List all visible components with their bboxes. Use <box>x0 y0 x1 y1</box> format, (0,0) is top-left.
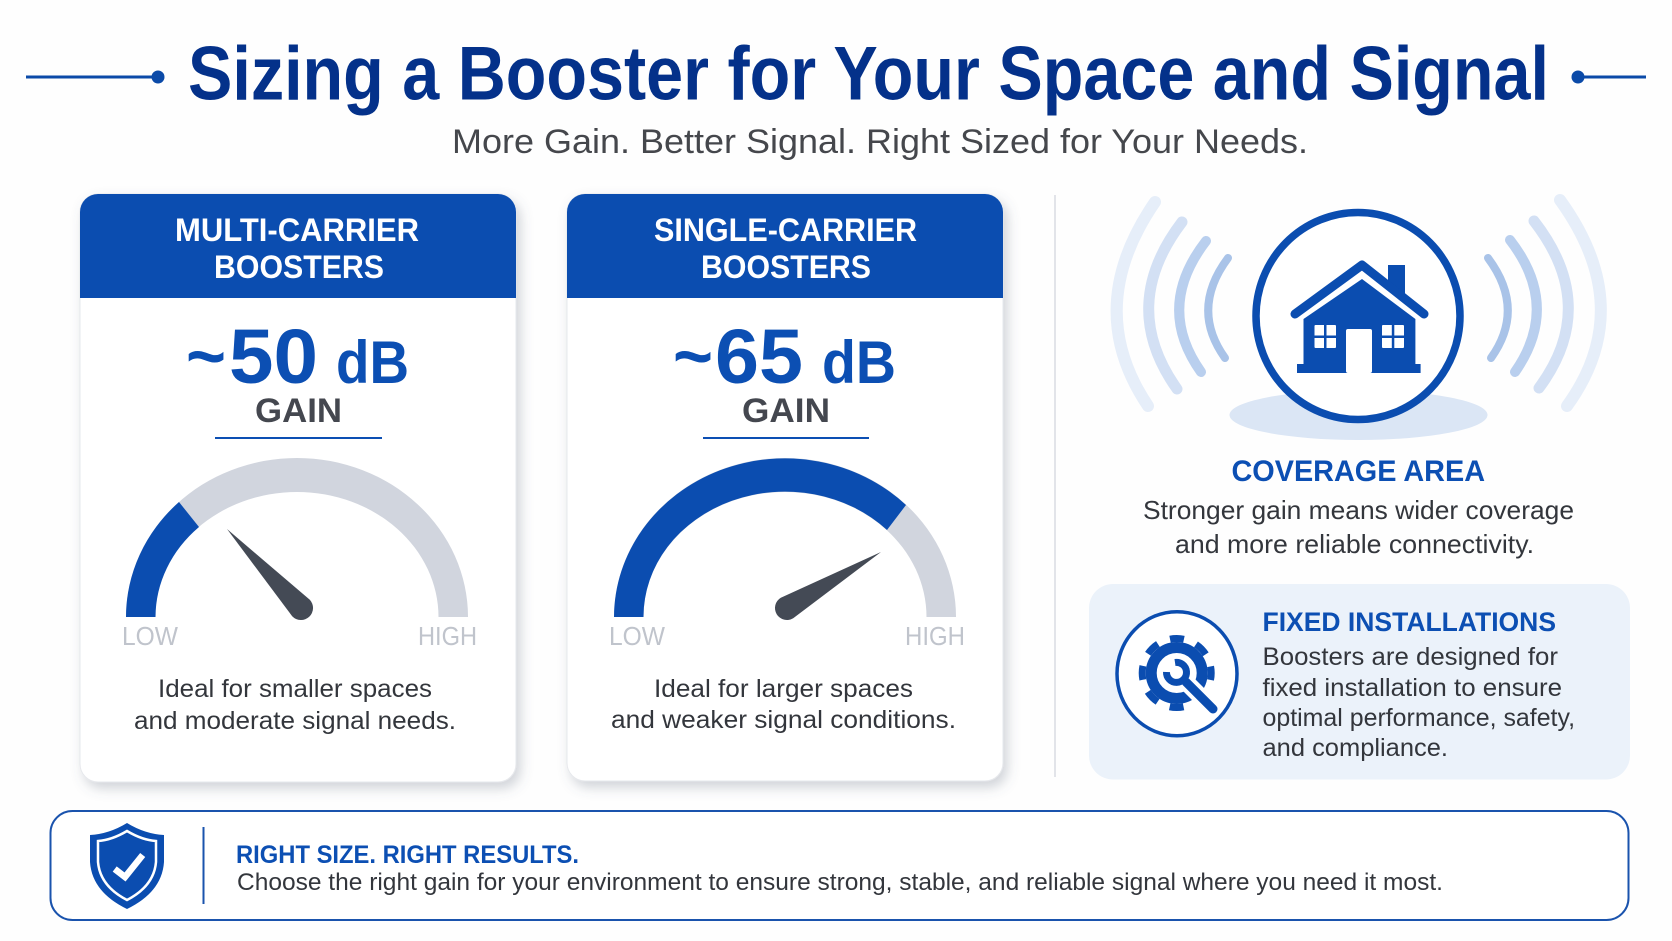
panel heading: FIXED INSTALLATIONS <box>1262 607 1556 637</box>
description <box>134 675 456 735</box>
card background <box>80 194 516 782</box>
panel text: and compliance. <box>1262 734 1448 762</box>
title left ornament <box>26 70 164 84</box>
house circle <box>1256 212 1460 420</box>
coverage area text: Stronger gain means wider coverage <box>1143 495 1574 525</box>
banner heading: RIGHT SIZE. RIGHT RESULTS. <box>236 841 579 869</box>
gauge: high gain <box>614 458 956 620</box>
coverage area text <box>1143 495 1574 559</box>
card header: SINGLE-CARRIER <box>654 212 917 248</box>
panel text: Boosters are designed for <box>1262 643 1558 671</box>
gain value: 50 <box>229 314 318 400</box>
ground ellipse <box>1230 390 1488 440</box>
gain value <box>186 314 409 400</box>
gauge low label: LOW <box>609 621 665 651</box>
description <box>611 675 956 734</box>
coverage area heading: COVERAGE AREA <box>1232 455 1485 488</box>
card background <box>567 194 1003 781</box>
icon: shield with check <box>90 823 164 909</box>
card header: MULTI-CARRIER <box>175 212 419 248</box>
signal waves left <box>1117 202 1228 406</box>
card header <box>567 194 1003 298</box>
gain label: GAIN <box>255 392 342 430</box>
icon: gear and wrench <box>1117 612 1237 736</box>
panel background <box>1089 584 1630 780</box>
gauge low label: LOW <box>122 621 178 651</box>
banner divider <box>202 827 204 904</box>
gain value: dB <box>336 329 409 396</box>
gain underline <box>703 437 869 439</box>
panel: fixed installations <box>1089 584 1630 780</box>
card header: BOOSTERS <box>214 249 384 285</box>
gain value: ~ <box>673 317 713 397</box>
card header: BOOSTERS <box>701 249 871 285</box>
gain value <box>673 314 896 400</box>
gain value: 65 <box>715 314 803 400</box>
gain value: dB <box>822 329 896 396</box>
gain label: GAIN <box>742 392 830 430</box>
house <box>1295 265 1424 373</box>
subtitle: More Gain. Better Signal. Right Sized for Your Needs. <box>452 123 1308 161</box>
panel: bottom banner <box>50 811 1628 920</box>
description: and weaker signal conditions. <box>611 706 956 734</box>
description: Ideal for smaller spaces <box>158 675 432 703</box>
title banner <box>26 32 1646 116</box>
gauge: low gain <box>126 458 468 620</box>
icon: house with signal waves <box>1117 200 1601 440</box>
description: and moderate signal needs. <box>134 707 456 735</box>
description: Ideal for larger spaces <box>654 675 913 703</box>
card header <box>80 194 516 298</box>
title right ornament <box>1572 70 1646 84</box>
gauge high label: HIGH <box>418 621 477 651</box>
panel text: optimal performance, safety, <box>1262 704 1575 732</box>
banner text: Choose the right gain for your environment to ensure strong, stable, and reliable signal where you need it most. <box>237 869 1443 896</box>
gauge high label: HIGH <box>905 621 965 651</box>
banner outline <box>50 811 1628 920</box>
panel text: fixed installation to ensure <box>1262 674 1562 702</box>
gain value: ~ <box>186 317 226 397</box>
gain underline <box>215 437 382 439</box>
panel: single-carrier boosters <box>567 194 1003 781</box>
signal waves right <box>1488 200 1601 406</box>
panel: multi-carrier boosters <box>80 194 516 782</box>
panel text <box>1262 643 1575 762</box>
coverage area text: and more reliable connectivity. <box>1175 529 1534 559</box>
